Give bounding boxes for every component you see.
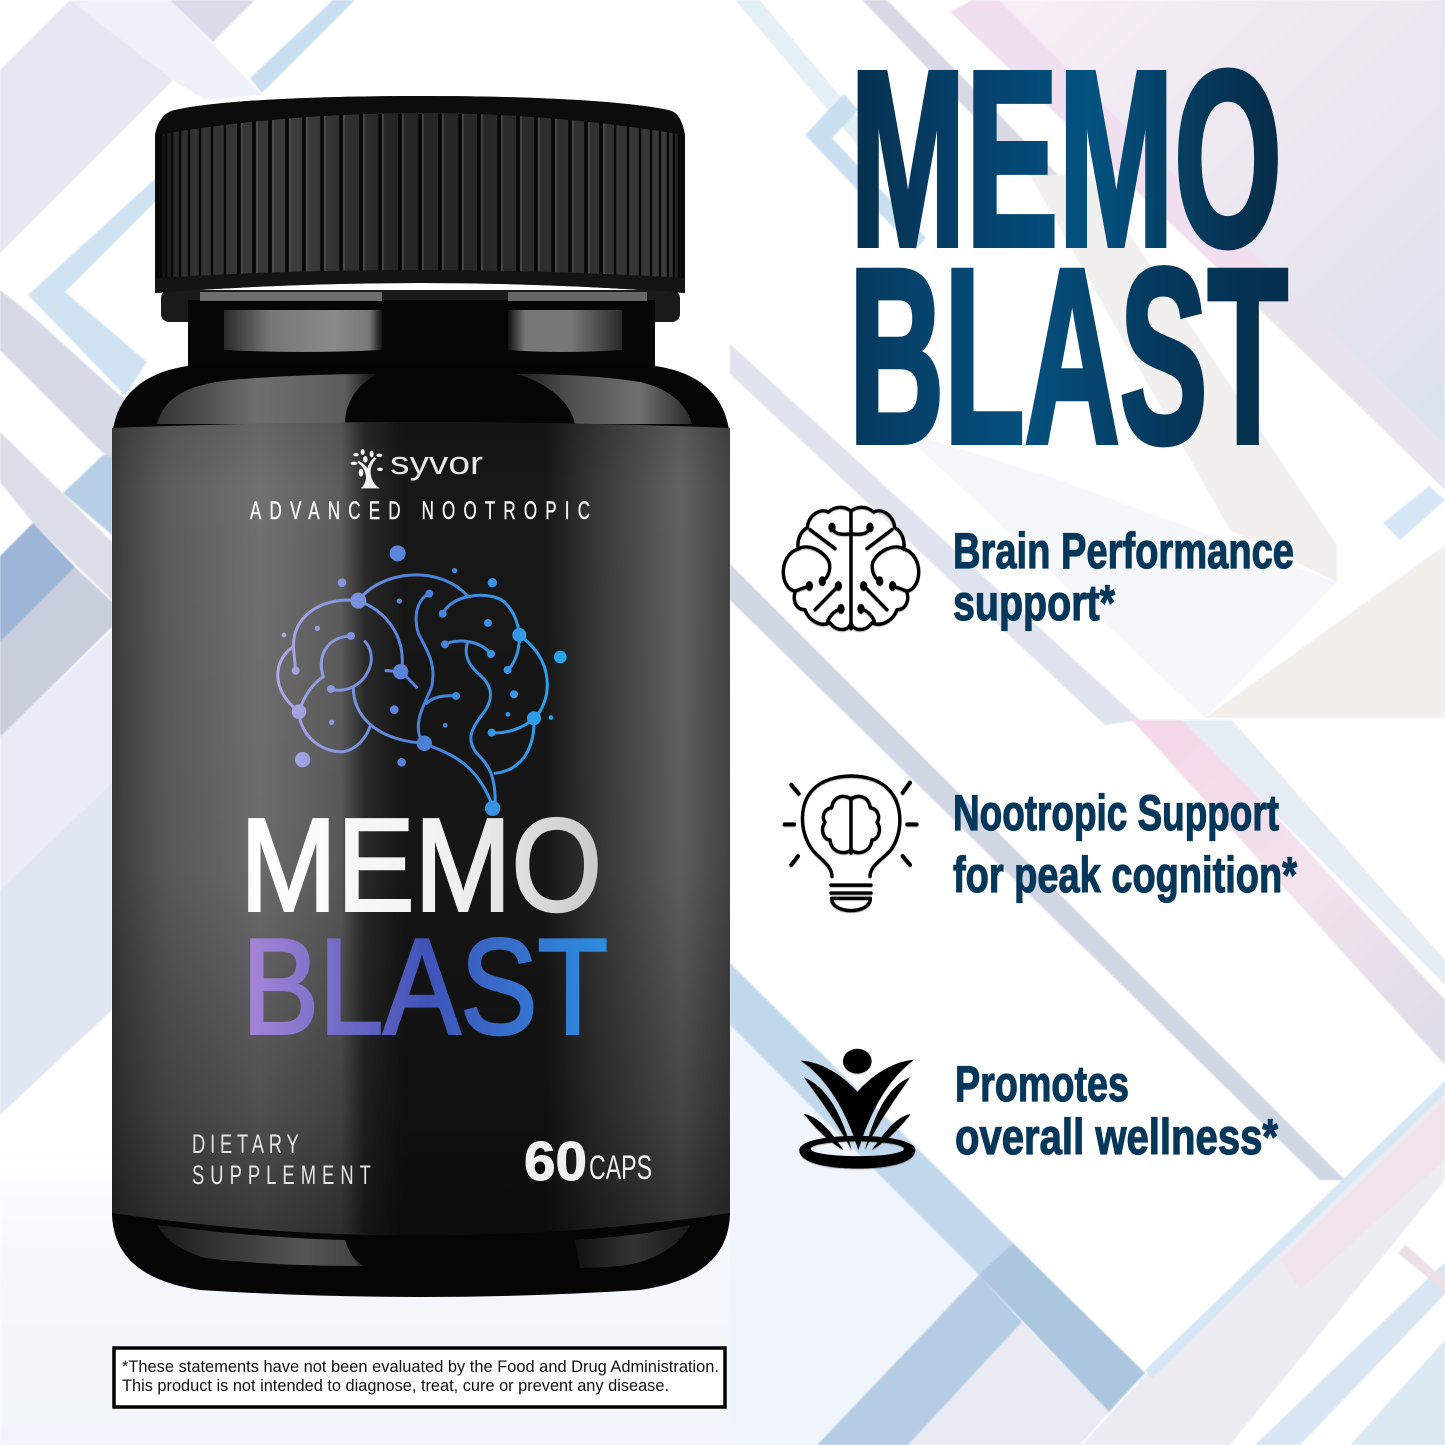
- icon: light bulb with brain: [785, 776, 917, 911]
- benefit text: Nootropic Support: [953, 785, 1279, 841]
- label product name: MEMO: MEMO: [240, 792, 602, 938]
- benefit: overall wellness: [799, 1049, 1278, 1168]
- collar: [161, 290, 680, 322]
- shoulder highlights: [157, 374, 692, 424]
- benefit: brain performance: [783, 507, 1294, 631]
- benefit text: [953, 785, 1297, 903]
- label subtitle: ADVANCED NOOTROPIC: [250, 497, 590, 525]
- capsule count: 60: [524, 1130, 587, 1192]
- label product name: BLAST: BLAST: [242, 910, 608, 1062]
- bottle label: [112, 422, 730, 1236]
- icon: brain with circuits: [783, 507, 919, 629]
- neck: [188, 300, 655, 366]
- icon: wellness figure: [799, 1049, 915, 1168]
- bottom highlights: [157, 1225, 690, 1268]
- neck highlights: [200, 292, 647, 352]
- brain logo: [278, 545, 567, 816]
- benefit text: Brain Performance: [953, 523, 1294, 579]
- benefit text: overall wellness*: [955, 1109, 1278, 1165]
- product bottle: [112, 96, 730, 1297]
- dietary supplement text: SUPPLEMENT: [192, 1159, 371, 1190]
- disclaimer text: [122, 1358, 719, 1395]
- benefit text: for peak cognition*: [953, 847, 1297, 903]
- dietary supplement text: DIETARY: [192, 1128, 299, 1159]
- capsule count: [524, 1130, 652, 1192]
- dietary supplement text: [192, 1128, 371, 1190]
- bottle body: [112, 322, 730, 1297]
- disclaimer box: [114, 1348, 725, 1407]
- benefit text: [955, 1056, 1278, 1165]
- benefit: nootropic support: [785, 776, 1297, 911]
- benefit text: support*: [953, 575, 1115, 631]
- benefit text: [953, 523, 1294, 631]
- disclaimer text: *These statements have not been evaluated by the Food and Drug Administration.: [122, 1358, 719, 1376]
- title: [849, 19, 1288, 495]
- capsule count: CAPS: [589, 1149, 652, 1187]
- logo icon: tree: [351, 449, 383, 488]
- bottle cap: [155, 96, 685, 293]
- disclaimer text: This product is not intended to diagnose, treat, cure or prevent any disease.: [122, 1377, 669, 1395]
- brand name: syvor: [390, 445, 483, 481]
- benefit text: Promotes: [955, 1056, 1129, 1112]
